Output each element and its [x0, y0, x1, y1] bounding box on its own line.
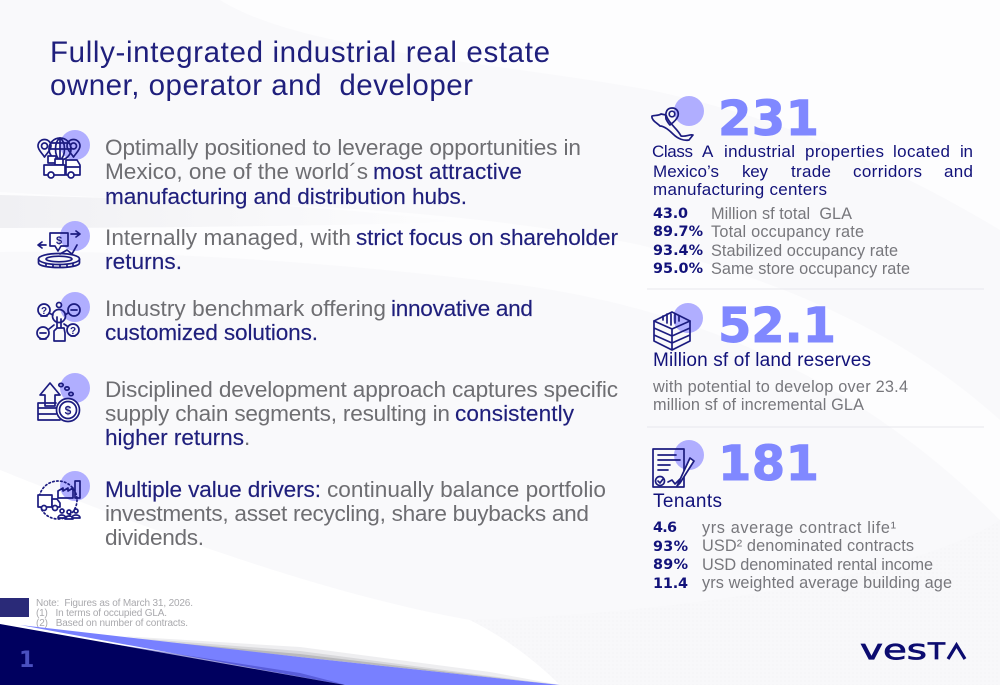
- icon: signed contract: [653, 440, 704, 487]
- metrics list: USD denominated rental income: [702, 556, 933, 574]
- text block: disciplined development: .: [244, 425, 250, 450]
- description: A: [702, 142, 714, 161]
- metrics list: [653, 519, 952, 592]
- metrics list: yrs average contract life¹: [702, 519, 897, 537]
- icon: truck, factory and people: [38, 471, 90, 519]
- footnotes: (2) Based on number of contracts.: [36, 618, 188, 629]
- bottom band: [0, 624, 560, 685]
- metrics list: 43.0: [653, 206, 688, 222]
- text block: internally managed: Internally managed, with: [105, 225, 351, 250]
- text block: value drivers: [105, 477, 606, 550]
- logo: [860, 633, 965, 666]
- text block: disciplined development: Disciplined development approach captures specific: [105, 377, 618, 402]
- text block: internally managed: [105, 225, 618, 274]
- text block: value drivers: Multiple value drivers:: [105, 477, 321, 502]
- number: 52.1: [718, 298, 836, 354]
- text block: disciplined development: consistently: [455, 401, 575, 426]
- description: properties: [805, 142, 884, 161]
- footnotes: (1) In terms of occupied GLA.: [36, 608, 167, 619]
- description: trade: [791, 162, 831, 181]
- text block: internally managed: returns.: [105, 249, 182, 274]
- text block: disciplined development: supply chain segments, resulting in: [105, 401, 450, 426]
- metrics list: 11.4: [653, 576, 688, 592]
- logo: ves: [860, 633, 927, 666]
- text block: optimal position: Optimally positioned to leverage opportunities in: [105, 135, 581, 160]
- icon: Mexico map pin: [652, 96, 704, 140]
- description: corridors: [853, 162, 922, 181]
- title: owner, operator and developer: [50, 69, 473, 102]
- metrics list: 95.0%: [653, 261, 703, 277]
- description: industrial: [724, 142, 795, 161]
- description: located: [893, 142, 950, 161]
- metrics list: USD² denominated contracts: [702, 537, 914, 555]
- metrics list: 89.7%: [653, 224, 703, 240]
- description: million sf of incremental GLA: [653, 396, 864, 414]
- text block: internally managed: strict focus on shareholder: [356, 225, 618, 250]
- title: Fully-integrated industrial real estate: [50, 36, 550, 69]
- stat block: 231 properties: [652, 91, 973, 278]
- description: Mexico’s: [653, 162, 719, 181]
- description: [652, 378, 908, 414]
- metrics list: 89%: [653, 557, 688, 573]
- metrics list: Total occupancy rate: [711, 223, 864, 241]
- text block: optimal position: most attractive: [373, 159, 522, 184]
- icon: layered land: [654, 303, 703, 350]
- text block: optimal position: [105, 135, 581, 209]
- icon: dollar and coin: [38, 221, 90, 268]
- stat block: 181 tenants: [653, 436, 952, 592]
- icon: rising coins: [38, 373, 90, 422]
- description: Class: [652, 142, 693, 161]
- text block: optimal position: Mexico, one of the world´s: [105, 159, 368, 184]
- description: key: [742, 162, 768, 181]
- text block: value drivers: dividends.: [105, 525, 204, 550]
- heading: Tenants: [653, 491, 722, 512]
- description: manufacturing centers: [653, 180, 827, 199]
- text block: industry benchmark: customized solutions.: [105, 320, 318, 345]
- number: 181: [718, 436, 819, 492]
- description: and: [944, 162, 973, 181]
- text block: value drivers: investments, asset recycling, share buybacks and: [105, 501, 589, 526]
- page number: 1: [19, 648, 34, 673]
- metrics list: [653, 205, 910, 278]
- metrics list: 93.4%: [653, 243, 703, 259]
- icon: ideas and support: ?: [70, 326, 76, 337]
- text block: value drivers: continually balance portfolio: [327, 477, 606, 502]
- footnotes: [36, 598, 193, 629]
- metrics list: Same store occupancy rate: [711, 260, 910, 278]
- description: with potential to develop over 23.4: [652, 378, 908, 396]
- text block: industry benchmark: [105, 296, 533, 345]
- icon: globe and truck: [38, 130, 90, 178]
- icon: ideas and support: [37, 292, 90, 341]
- footnotes: Note: Figures as of March 31, 2026.: [36, 598, 193, 609]
- heading: Million sf of land reserves: [653, 350, 871, 371]
- metrics list: Stabilized occupancy rate: [711, 242, 898, 260]
- text block: industry benchmark: innovative and: [391, 296, 533, 321]
- text block: disciplined development: higher returns: [105, 425, 244, 450]
- metrics list: 93%: [653, 539, 688, 555]
- number: 231: [718, 91, 819, 147]
- logo: T: [927, 640, 946, 665]
- metrics list: yrs weighted average building age: [702, 574, 952, 592]
- icon: dollar and coin: $: [56, 235, 62, 247]
- icon: ideas and support: ?: [41, 306, 47, 317]
- accent block: [0, 598, 29, 617]
- description: [652, 142, 973, 199]
- title: [50, 36, 550, 102]
- metrics list: Million sf total GLA: [711, 205, 852, 223]
- stat block: 52.1 land reserves: [652, 298, 908, 414]
- text block: optimal position: manufacturing and distribution hubs.: [105, 184, 467, 209]
- description: in: [960, 142, 973, 161]
- text block: disciplined development: [105, 377, 618, 450]
- metrics list: 4.6: [653, 520, 677, 536]
- text block: industry benchmark: Industry benchmark offering: [105, 296, 386, 321]
- icon: rising coins: $: [65, 404, 72, 418]
